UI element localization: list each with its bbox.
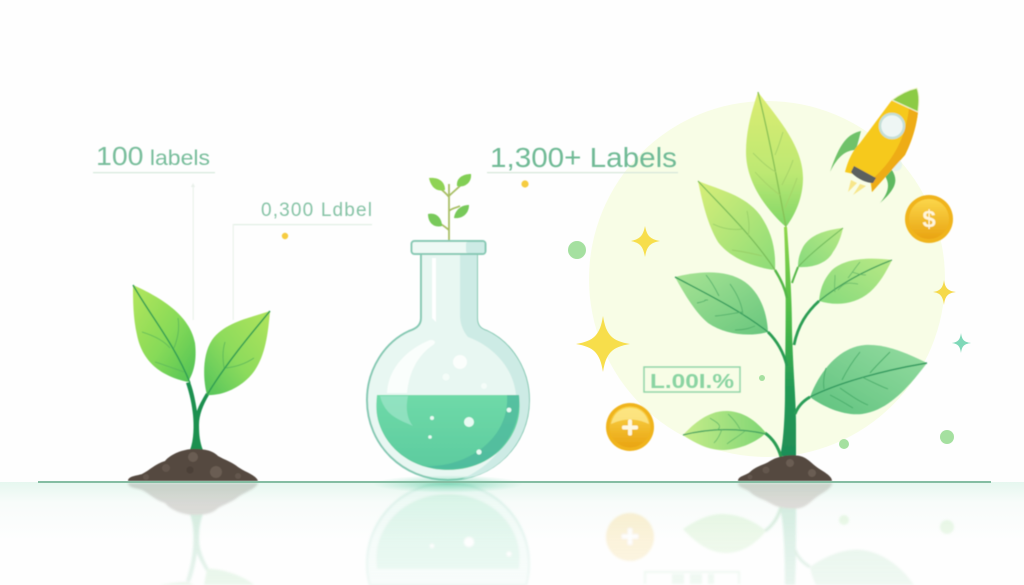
main stem and branches	[765, 227, 819, 457]
right yellow sparkle	[933, 280, 956, 305]
rocket window	[880, 114, 904, 138]
rocket nozzle	[851, 166, 876, 183]
ground line	[38, 481, 991, 483]
flask right shade	[460, 254, 529, 479]
flask contact glow	[373, 475, 523, 493]
lower left leaf	[683, 411, 766, 450]
upper right small leaf	[798, 228, 843, 267]
upper glass highlight	[387, 340, 435, 393]
middle left leaf	[675, 272, 768, 335]
coin with plus	[606, 403, 654, 451]
rocket fins	[830, 131, 861, 172]
large yellow sparkle	[576, 316, 630, 372]
flask with sprout	[367, 174, 529, 480]
reflected boxed label	[644, 571, 740, 584]
label: 1,300+ Labels	[487, 142, 678, 188]
rocket nose cone	[892, 88, 919, 112]
rocket exhaust	[848, 180, 866, 195]
bubbles	[428, 355, 511, 455]
seedling left leaf	[133, 285, 196, 383]
seedling soil mound	[128, 449, 258, 481]
floor reflection	[128, 483, 954, 585]
small yellow sparkle	[631, 226, 660, 257]
small boxed label: L.00I.%	[650, 371, 734, 393]
small seedling	[128, 285, 270, 481]
small boxed label	[644, 367, 740, 393]
flask glass body	[367, 254, 529, 480]
reflected large plant	[683, 483, 954, 585]
flask lip	[412, 241, 486, 254]
liquid left highlight	[380, 396, 413, 426]
large plant	[675, 92, 927, 481]
reflected flask	[367, 483, 529, 585]
dollar coin	[905, 195, 953, 243]
label: 0,300 Label	[233, 200, 372, 320]
liquid darker side	[425, 395, 519, 469]
label: 100 labels: 100 labels	[96, 141, 210, 171]
dollar coin: $	[922, 206, 936, 233]
reflected coin	[606, 513, 654, 561]
label: 100 labels	[93, 141, 215, 320]
upper left leaf	[698, 181, 775, 270]
decorative green dots	[568, 241, 954, 449]
sprout in flask	[428, 174, 471, 241]
seedling stem	[186, 382, 209, 450]
middle right leaf	[819, 259, 892, 304]
rocket body	[845, 100, 918, 192]
rocket	[830, 88, 919, 203]
label: 1,300+ Labels: 1,300+ Labels	[490, 142, 677, 173]
big plant soil mound	[738, 455, 832, 481]
pale yellow circle behind large plant	[589, 101, 945, 457]
floor reflection tint	[0, 482, 1024, 542]
label: 0,300 Label: 0,300 Ldbel	[261, 200, 372, 221]
top leaf	[746, 92, 803, 227]
reflected seedling	[128, 483, 258, 585]
flask liquid	[376, 395, 520, 470]
lower right leaf	[810, 345, 927, 414]
teal sparkle	[952, 333, 971, 353]
seedling right leaf	[204, 311, 270, 395]
